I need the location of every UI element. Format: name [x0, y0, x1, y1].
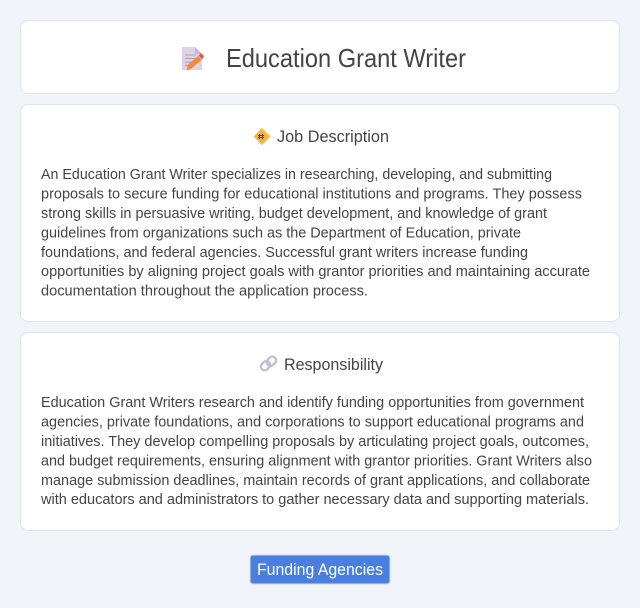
responsibility text: agencies, private foundations, and corporations to support educational programs and	[41, 414, 584, 430]
job description text	[41, 167, 590, 300]
job description text: foundations, and federal agencies. Successful grant writers increase funding	[41, 245, 528, 261]
panel: title card	[20, 20, 620, 94]
job description text: An Education Grant Writer specializes in researching, developing, and submitting	[41, 167, 552, 183]
responsibility text: initiatives. They develop compelling proposals by articulating project goals, outcomes,	[41, 434, 589, 450]
icon: orange diamond sign	[254, 128, 270, 144]
panel: job description card	[20, 104, 620, 322]
responsibility text	[40, 395, 592, 508]
job description text: strong skills in persuasive writing, budget development, and knowledge of grant	[41, 206, 547, 222]
title: Education Grant Writer	[226, 43, 466, 73]
responsibility text: and budget requirements, ensuring alignment with grantor priorities. Grant Writers also	[41, 453, 592, 469]
job description text: documentation throughout the application process.	[41, 284, 368, 300]
responsibility text: manage submission deadlines, maintain records of grant applications, and collaborate	[41, 473, 590, 489]
job description text: proposals to secure funding for educational institutions and programs. They possess	[41, 186, 582, 202]
heading: responsibility: Responsibility	[284, 356, 384, 374]
panel: responsibility card	[20, 332, 620, 531]
heading: job description: Job Description	[277, 128, 389, 146]
responsibility text: with educators and administrators to gather necessary data and supporting materials.	[40, 492, 589, 508]
responsibility text: Education Grant Writers research and identify funding opportunities from government	[41, 395, 584, 411]
icon: document with pencil	[182, 47, 204, 70]
job description text: guidelines from organizations such as the Department of Education, private	[41, 225, 521, 241]
job description text: opportunities by aligning project goals with grantor priorities and maintaining accurate	[41, 264, 590, 280]
button: funding agencies: Funding Agencies	[257, 561, 383, 579]
icon: chain link	[259, 355, 278, 372]
button: funding agencies	[250, 555, 390, 584]
